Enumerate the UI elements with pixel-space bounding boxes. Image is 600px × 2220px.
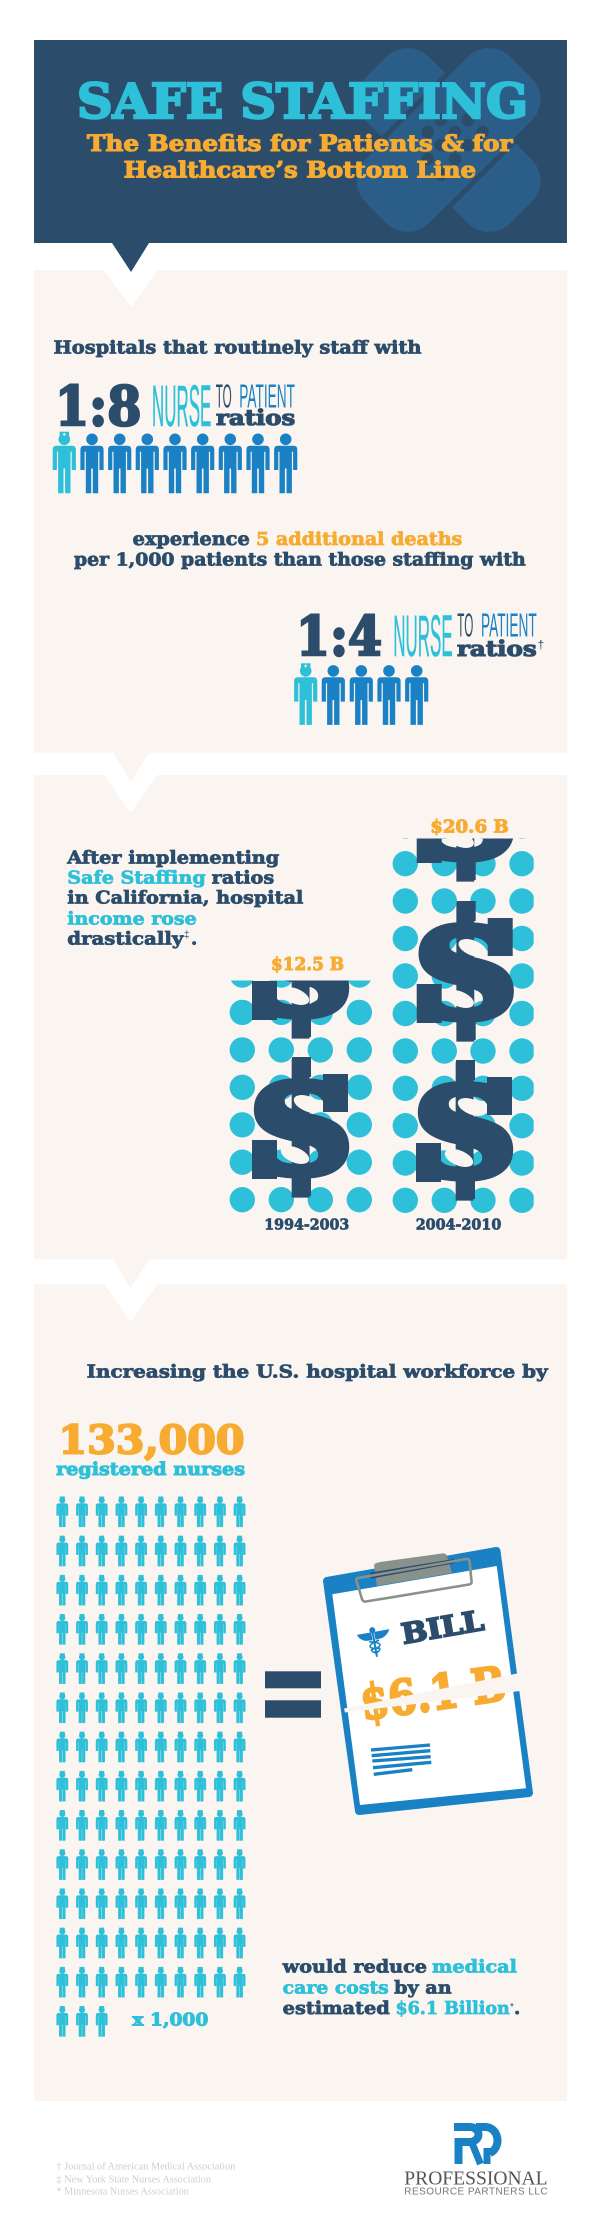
footnotes: † Journal of American Medical Association [56, 2160, 236, 2172]
equals sign [265, 1671, 321, 1718]
logo: Professional Resource Partners: PROFESSIONAL [404, 2167, 548, 2189]
label: 2004-2010: 2004-2010 [416, 1215, 501, 1233]
text: reduced costs: * [510, 2002, 514, 2013]
chart: 2004-2010 income: $ [408, 881, 524, 1051]
bill amount: $6.1 B [357, 1656, 509, 1732]
ratio 1:8: 1:8 [55, 374, 142, 438]
bill text lines [371, 1745, 431, 1774]
ratio 1:8 [55, 374, 295, 439]
title: SAFE STAFFING [77, 74, 528, 130]
ratio 1:4: ratios [457, 636, 537, 661]
chart: 1994-2003 income: $ [243, 878, 359, 1048]
ratio 1:8: ratios [216, 405, 295, 430]
text: additional deaths: per 1,000 patients than those staffing with [74, 551, 526, 571]
text: reduced costs: estimated [283, 1998, 390, 2019]
header pointer [112, 243, 149, 272]
label: 1994-2003: 1994-2003 [264, 1215, 349, 1233]
icon: caduceus [356, 1624, 394, 1660]
text: additional deaths [74, 530, 526, 571]
panel: staffing ratios: PATIENT [239, 377, 295, 414]
text: reduced costs: by an [394, 1977, 452, 1998]
panel: workforce savings [34, 1259, 567, 2101]
clip [356, 1553, 472, 1602]
footnotes: ‡ New York State Nurses Association [56, 2173, 211, 2185]
panel pointer [113, 1259, 149, 1288]
ratio 1:4: NURSE [393, 604, 453, 669]
ratio 1:4 [296, 604, 544, 669]
bill heading: BILL [399, 1604, 487, 1651]
pictogram: one nurse to four patients [294, 663, 428, 725]
text: reduced costs: $6.1 Billion [396, 1998, 510, 2019]
subtitle line 2: Healthcare’s Bottom Line [124, 157, 476, 183]
panel: staffing ratios [34, 243, 567, 753]
ratio 1:8: NURSE [152, 374, 211, 439]
ratio 1:4: † [538, 638, 544, 652]
panel pointer [113, 752, 149, 782]
text: additional deaths: 5 additional deaths [256, 530, 462, 550]
text: income intro: . [191, 928, 197, 949]
heading: hospitals: Hospitals that routinely staff with [54, 338, 422, 358]
label: $20.6 B: $20.6 B [430, 817, 509, 838]
ratio 1:4: 1:4 [296, 604, 382, 668]
logo: Professional Resource Partners: RESOURCE PARTNERS LLC [404, 2187, 548, 2198]
chart: 1994-2003 income [230, 980, 372, 1212]
text: income intro: After implementing [66, 847, 280, 868]
text: income intro [66, 847, 303, 949]
text: reduced costs: care costs [283, 1977, 389, 1998]
ratio 1:8: TO [216, 377, 232, 414]
icon: clipboard bill [327, 1551, 529, 1811]
text: income intro: in California, hospital [67, 888, 303, 909]
chart: 2004-2010 income: $ [407, 1040, 523, 1210]
heading: increasing workforce: Increasing the U.S. hospital workforce by [87, 1362, 548, 1383]
pictogram: nurses grid [57, 1497, 245, 2036]
label: x 1,000: x 1,000 [132, 2009, 208, 2030]
torn strip [344, 1672, 524, 1712]
ratio 1:4: TO [457, 607, 473, 644]
text: income intro: ‡ [184, 930, 190, 941]
label: $12.5 B: $12.5 B [271, 954, 344, 975]
footnotes: * Minnesota Nurses Association [56, 2185, 189, 2197]
chart: 1994-2003 income: $ [243, 1037, 359, 1207]
footnotes [56, 2160, 236, 2197]
label: registered nurses: registered nurses [56, 1459, 245, 1480]
text: income intro: income rose [67, 908, 197, 929]
text: income intro: ratios [212, 867, 274, 888]
text: income intro: Safe Staffing [67, 867, 206, 888]
pictogram: one nurse to eight patients [53, 432, 297, 493]
logo mark [454, 2127, 497, 2164]
text: reduced costs: medical [432, 1957, 517, 1978]
text: reduced costs [282, 1957, 520, 2019]
text: additional deaths: experience [133, 530, 250, 550]
panel: hospital income [34, 721, 567, 1259]
big number 133,000: 133,000 [58, 1418, 245, 1464]
chart: 2004-2010 income: $ [408, 721, 524, 891]
icon: crossed bandages [344, 36, 553, 244]
header banner [34, 36, 567, 244]
text: reduced costs: . [514, 1998, 520, 2019]
subtitle line 1: The Benefits for Patients & for [87, 131, 513, 157]
chart: 2004-2010 income [392, 838, 534, 1213]
text: reduced costs: would reduce [282, 1957, 427, 1978]
logo: Professional Resource Partners [404, 2127, 548, 2198]
text: income intro: drastically [67, 928, 184, 949]
